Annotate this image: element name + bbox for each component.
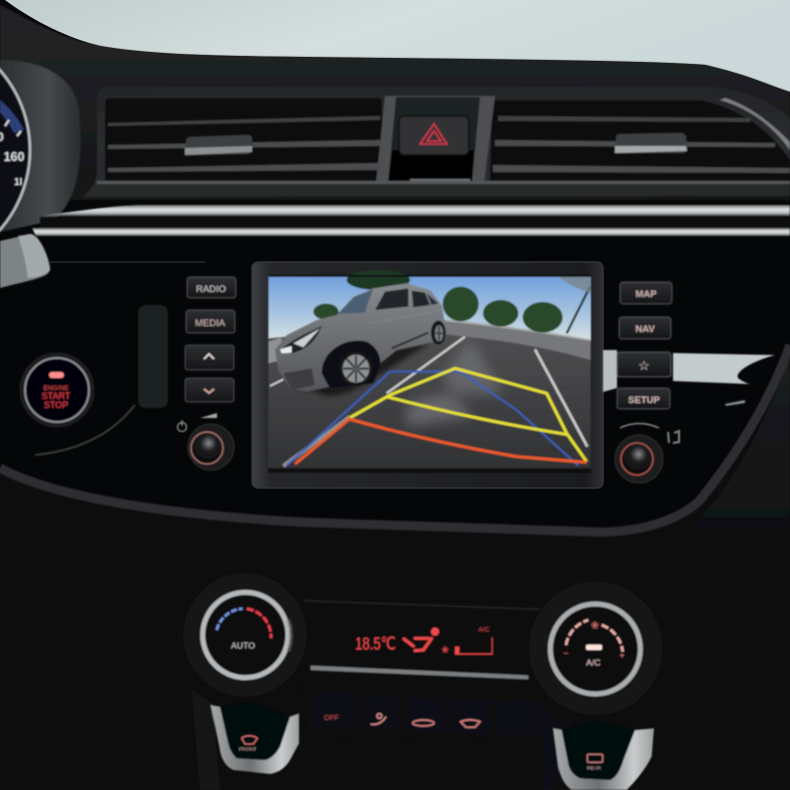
glossy reflection [603, 350, 775, 406]
rear camera view [268, 270, 591, 472]
button: favorite star [617, 352, 671, 377]
temperature readout: 18.5℃ [355, 633, 396, 653]
icon: hazard triangle [420, 124, 447, 144]
car body [275, 283, 445, 392]
parking lines white [270, 337, 587, 466]
start stop button [21, 354, 93, 426]
start stop button: ENGINE [44, 385, 69, 392]
car [275, 283, 446, 396]
button: down [185, 378, 234, 402]
car door line and sill [392, 333, 428, 348]
minus plus: – [564, 648, 569, 657]
chrome divider [311, 666, 528, 679]
front defrost hook [211, 702, 299, 774]
vent knob left [185, 135, 252, 155]
panel: left controls [21, 277, 236, 470]
icon: fan: ❀ [442, 644, 450, 654]
fan speed bar [455, 637, 493, 655]
car headlight [282, 326, 322, 353]
trees [313, 270, 563, 333]
right vent [490, 98, 790, 182]
button: NAV [619, 317, 671, 339]
red scale [247, 609, 271, 638]
button: SETUP [617, 388, 670, 409]
chrome trim strips [32, 205, 790, 236]
gauge partial numbers [0, 130, 23, 188]
volume indicator [200, 413, 217, 418]
button: RADIO [187, 277, 236, 298]
instrument cluster [0, 29, 81, 271]
gauge partial numbers: 1I [14, 177, 23, 188]
front defrost icon [242, 736, 257, 744]
front label: FRONT [239, 747, 256, 753]
blue scale [217, 609, 243, 630]
left temperature dial [183, 573, 307, 697]
a/c label: A/C [478, 626, 490, 633]
sky [268, 275, 591, 342]
right fan dial [529, 582, 662, 715]
fan scale [566, 620, 623, 652]
turn signal stalk [0, 234, 50, 288]
center screen [252, 262, 603, 488]
dashboard top trim [0, 5, 790, 200]
function buttons row [310, 694, 542, 735]
panel: air vents [82, 86, 790, 197]
hazard housing [376, 96, 495, 183]
fan icon: ❀ [591, 620, 599, 631]
rear defrost icon [587, 754, 603, 762]
vent surround [82, 86, 790, 197]
front wheel [322, 341, 380, 388]
button: NAV: NAV [635, 324, 655, 335]
button: RADIO: RADIO [196, 284, 226, 295]
guide lines yellow [350, 368, 587, 462]
curved trim line [35, 405, 135, 455]
car bumper [283, 368, 315, 390]
tuning knob [615, 435, 663, 483]
disc slot [138, 305, 168, 408]
windshield [0, 0, 790, 92]
icon: seat airflow [404, 629, 438, 651]
guide line red [295, 419, 587, 464]
right fan dial: + [619, 650, 625, 660]
stem left [192, 690, 220, 790]
console upper seam [50, 261, 205, 263]
panel: climate control [177, 572, 667, 790]
button: MEDIA [186, 310, 235, 333]
button: MAP: MAP [635, 289, 657, 300]
start stop button: START [42, 391, 71, 401]
lower dash trim band [0, 345, 790, 790]
tuning arc [620, 424, 659, 428]
start stop button: STOP [44, 400, 68, 410]
rear label: REAR [587, 765, 601, 771]
screen bezel [252, 262, 603, 488]
button: SETUP: SETUP [628, 395, 660, 406]
stem right [543, 710, 570, 790]
auto label: AUTO [231, 641, 255, 651]
button: MEDIA: MEDIA [195, 318, 226, 329]
gauge number: 160 [4, 150, 24, 164]
panel: right controls [603, 282, 775, 483]
recirculate icon [371, 714, 386, 724]
windshield icon [461, 720, 480, 727]
button: favorite star: ☆ [638, 358, 650, 373]
button: MAP [620, 282, 672, 304]
car air icon [413, 720, 434, 726]
rear wheel [431, 321, 446, 345]
main black console panel [0, 235, 790, 530]
guide line blue [287, 372, 578, 466]
curb [443, 320, 591, 360]
road light patches [407, 340, 503, 427]
off label: OFF [324, 713, 339, 722]
volume knob [188, 424, 234, 470]
left vent [105, 98, 382, 182]
digital display [303, 601, 540, 670]
gauge dial [0, 29, 30, 271]
hazard button [399, 116, 469, 155]
car windows [337, 289, 373, 314]
ac label: A/C [586, 657, 601, 667]
button: up [185, 345, 234, 370]
climate housing [177, 572, 667, 740]
cluster pod [0, 60, 81, 232]
icon: voice [668, 431, 679, 443]
road [268, 320, 591, 468]
vent knob right [615, 133, 687, 153]
center indicator [586, 645, 602, 650]
rear defrost hook [553, 720, 654, 790]
icon: power [178, 420, 186, 432]
